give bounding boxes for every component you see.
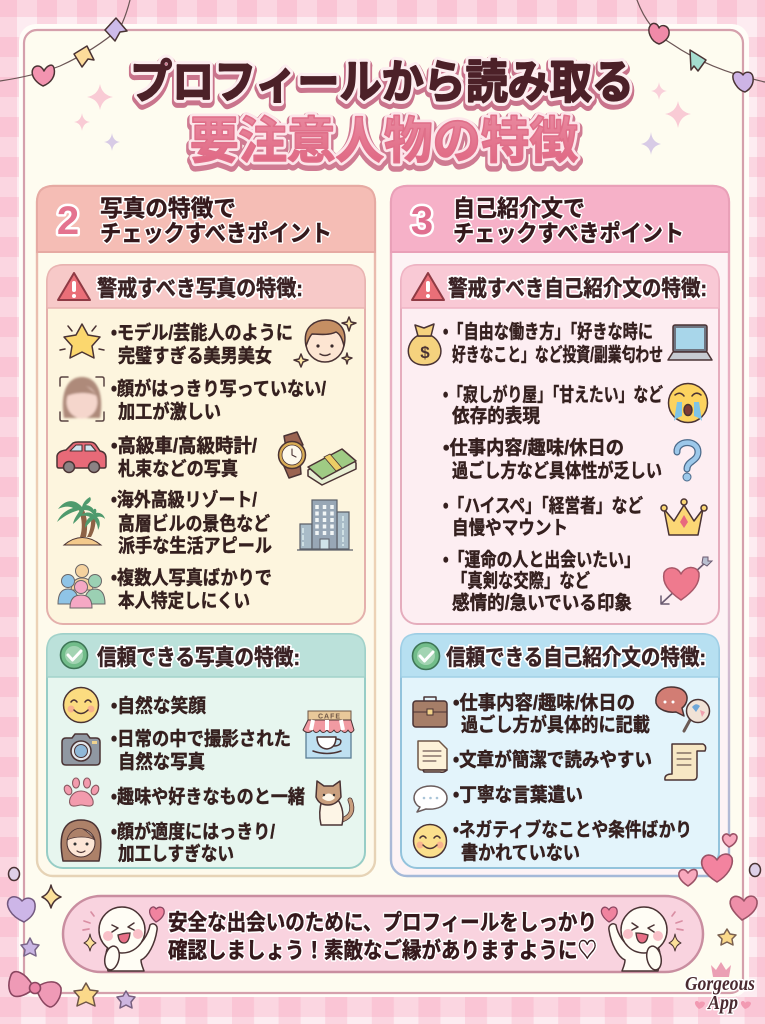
text: concrete details: •仕事内容/趣味/休日の [453,692,635,714]
icon: document [418,741,447,772]
panel header: self-introduction: 自己紹介文で [453,195,585,221]
text: resort and towers: •海外高級リゾート/ [111,489,258,511]
icon: camera [62,734,100,765]
panel header: self-introduction: 自己紹介文で [453,195,585,221]
text: investment hints [443,320,663,366]
text: everyday photo [111,728,291,773]
icon: money bag [408,324,441,365]
panel header: photo: 写真の特徴で [100,195,236,221]
panel header: photo: チェックすべきポイント [100,220,332,246]
character: right cheering [609,907,683,971]
text: model-like: 完璧すぎる美男美女 [118,344,272,367]
text: investment hints: •「自由な働き方」「好きな時に [443,320,653,343]
icon: star [60,324,104,358]
icon: buildings [297,500,353,550]
icon: cafe shop [303,711,354,758]
text: concrete details [453,692,650,736]
text: group shots: 本人特定しにくい [118,590,250,612]
text: lacking specifics [443,437,662,482]
text: everyday photo: 自然な写真 [118,750,205,773]
icon: banknotes [308,449,356,485]
icon: heart left [150,907,164,922]
bunting: top right [637,0,765,92]
heading: warning self-introductions: 警戒すべき自己紹介文の特徴: [448,276,707,301]
text: bragging: 自慢やマウント [452,517,568,539]
text: everyday photo: •日常の中で撮影された [111,728,291,750]
icon: pink bow [9,972,61,1007]
banner message [168,910,597,963]
icon: chat bubble [414,786,447,812]
title: 要注意人物の特徴 [190,113,578,169]
text: no negativity [453,818,692,864]
icon: briefcase [413,697,447,727]
text: investment hints: 好きなこと」など投資/副業匂わせ [452,344,663,366]
text: luxury items [111,434,258,480]
icon: red car [57,442,106,472]
subpanel: warning photos [47,265,365,624]
icon: check mark [412,642,440,670]
text: unclear face: 加工が激しい [118,400,221,423]
panel header: self-introduction: チェックすべきポイント [453,220,684,246]
icon: smiling woman [61,820,101,861]
text: luxury items: 札束などの写真 [118,458,238,480]
title [130,56,634,172]
heading: trustworthy self-introductions: 信頼できる自己紹介文の特徴: [446,645,706,670]
icon: heart with arrow [661,557,712,604]
icon: check mark [60,642,88,668]
text: moderately clear: •顔が適度にはっきり/ [111,820,276,843]
title: 要注意人物の特徴 [190,116,578,172]
text: resort and towers: 派手な生活アピール [118,535,272,557]
icon: group of people [58,564,105,608]
icon: warning triangle [412,273,444,300]
text: dependent expressions: •「寂しがり屋」「甘えたい」など [443,383,663,406]
icon: heart right [601,907,617,922]
icon: warning triangle [58,273,90,300]
text: model-like [111,321,293,367]
icon: money bag: $ [420,343,430,362]
decorative ornaments left and right [8,864,760,956]
decorative hearts lower right [679,834,757,920]
panel: photo features [37,186,375,876]
icon: question mark [677,443,698,481]
icon: speech bubble and magnifier [656,687,710,731]
decorative stars lower left [74,983,135,1008]
text: emotional urgency: •「運命の人と出会いたい」 [443,549,640,571]
character: left cheering [83,907,157,971]
text: model-like: •モデル/芸能人のように [111,321,293,344]
panel header: photo [37,186,375,252]
text: emotional urgency [443,549,640,614]
banner message: 確認しましょう！素敵なご縁がありますように♡ [168,938,597,963]
text: group shots: •複数人写真ばかりで [111,567,272,589]
text: bragging: •「ハイスペ」「経営者」など [443,495,643,517]
logo: Gorgeous App [685,962,755,1014]
icon: smiling face [414,824,446,858]
text: bragging [443,495,643,539]
text: natural smile: •自然な笑顔 [111,694,206,717]
icon: laptop [668,325,712,360]
heading: warning photos: 警戒すべき写真の特徴: [97,276,303,301]
text: dependent expressions: 依存的表現 [452,405,540,427]
icon: blurred woman [60,377,104,421]
text: group shots [111,567,272,612]
text: unclear face: •顔がはっきり写っていない/ [111,377,327,400]
heading: trustworthy self-introductions: 信頼できる自己紹介文の特徴: [446,645,706,670]
icon: smiling face [64,688,98,722]
text: concise writing: •文章が簡潔で読みやすい [453,748,652,771]
icon: cat [316,781,352,825]
icon: palm trees [57,497,105,545]
title: 要注意人物の特徴 [190,113,578,169]
title: プロフィールから読み取る [130,59,634,111]
panel header: self-introduction: 3 [411,199,433,243]
text: emotional urgency: 感情的/急いでいる印象 [452,591,632,614]
heading: trustworthy photos: 信頼できる写真の特徴: [97,645,300,670]
icon: cafe shop: CAFE [318,714,340,720]
text: dependent expressions [443,383,663,427]
closing banner [63,896,703,972]
icon: handsome face [294,317,356,367]
logo: Gorgeous App: Gorgeous [685,973,755,995]
text: lacking specifics: 過ごし方など具体性が乏しい [452,459,662,482]
text: unclear face [111,377,327,423]
text: moderately clear: 加工しすぎない [118,842,234,865]
text: resort and towers [111,489,272,557]
panel header: photo: 写真の特徴で [100,195,236,221]
icon: scroll [665,744,706,780]
heading: warning photos: 警戒すべき写真の特徴: [97,276,303,301]
text: no negativity: 書かれていない [461,841,580,864]
decorative sparkles by title [74,82,691,155]
heading: warning self-introductions: 警戒すべき自己紹介文の特徴: [448,276,707,301]
panel header: self-introduction: チェックすべきポイント [453,220,684,246]
title: プロフィールから読み取る [130,56,634,108]
banner message: 確認しましょう！素敵なご縁がありますように♡ [168,938,597,963]
text: luxury items: •高級車/高級時計/ [111,434,258,457]
banner message: 安全な出会いのために、プロフィールをしっかり [168,910,597,935]
panel: self-introduction features [391,186,729,876]
icon: crown [661,499,707,535]
text: moderately clear [111,820,276,865]
subpanel: trustworthy self-introductions [401,634,719,868]
bunting: top left [0,0,130,86]
text: concrete details: 過ごし方が具体的に記載 [461,713,650,736]
heading: trustworthy photos: 信頼できる写真の特徴: [97,645,300,670]
icon: crying face [668,384,708,422]
logo: Gorgeous App: App [706,992,738,1014]
text: lacking specifics: •仕事内容/趣味/休日の [443,437,624,459]
subpanel: warning self-introductions [401,265,719,624]
panel header: photo: 2 [57,199,79,243]
panel header: photo: チェックすべきポイント [100,220,332,246]
subpanel: trustworthy photos [47,634,365,868]
banner message: 安全な出会いのために、プロフィールをしっかり [168,910,597,935]
text: no negativity: •ネガティブなことや条件ばかり [453,818,692,841]
panel header: self-introduction [391,186,729,252]
text: hobbies: •趣味や好きなものと一緒 [111,786,305,808]
text: polite language: •丁寧な言葉遣い [453,784,583,806]
icon: paw print [63,778,100,806]
text: resort and towers: 高層ビルの景色など [118,513,270,535]
text: emotional urgency: 「真剣な交際」など [452,570,590,592]
title: プロフィールから読み取る [130,56,634,108]
icon: wristwatch [278,432,306,478]
